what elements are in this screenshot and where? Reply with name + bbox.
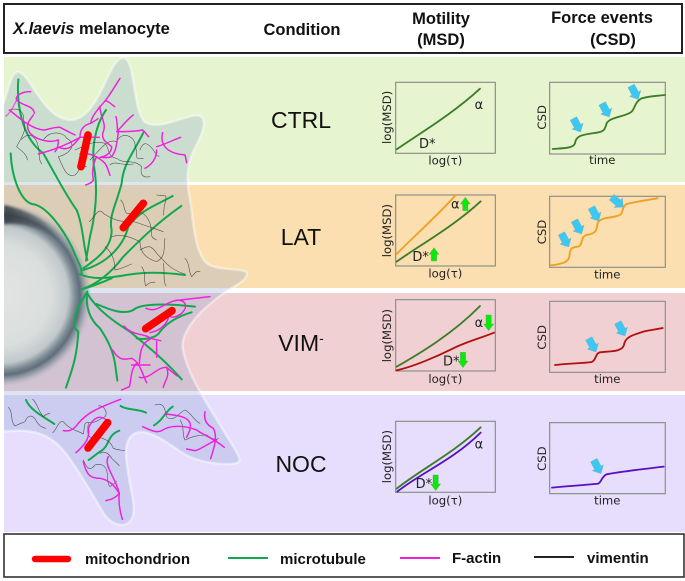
microtubules upper xyxy=(11,79,185,289)
mitochondrion VIM xyxy=(146,311,172,329)
chart: CTRL MSD: log(τ) xyxy=(428,154,462,168)
charts: CTRL and LAT xyxy=(380,82,665,281)
legend: F-actin: F-actin xyxy=(452,550,501,567)
chart: NOC CSD xyxy=(535,423,665,507)
chart: NOC CSD: CSD xyxy=(535,446,549,471)
mitochondrion NOC xyxy=(88,423,108,448)
header bar xyxy=(4,4,682,53)
chart: VIM MSD: log(τ) xyxy=(428,372,462,386)
chart: VIM MSD: D* xyxy=(443,355,460,370)
vimentin upper xyxy=(9,109,200,286)
chart: NOC CSD: time xyxy=(594,493,620,507)
heading: cell: X.laevis melanocyte xyxy=(12,20,170,38)
heading: condition: Condition xyxy=(264,21,340,39)
legend: vimentin: vimentin xyxy=(587,550,649,567)
cell outline xyxy=(0,58,247,525)
legend: F-actin xyxy=(400,550,501,567)
legend xyxy=(4,534,684,577)
chart: VIM MSD xyxy=(380,300,495,386)
chart: LAT MSD: α xyxy=(451,198,460,213)
chart: CTRL CSD: time xyxy=(589,153,615,167)
condition label: LAT: LAT xyxy=(281,224,321,250)
chart: LAT CSD: time xyxy=(594,267,620,281)
legend: microtubule: microtubule xyxy=(280,551,366,568)
chart: CTRL MSD xyxy=(380,82,495,168)
chart: VIM MSD: log(MSD) xyxy=(380,309,394,362)
chart: VIM CSD xyxy=(535,301,665,386)
condition label: VIM-: VIM xyxy=(278,330,319,356)
chart: NOC MSD: log(MSD) xyxy=(380,430,394,483)
chart: VIM CSD: CSD xyxy=(535,325,549,350)
panel: NOC background band xyxy=(4,395,685,532)
chart: LAT MSD: D* xyxy=(412,250,429,265)
panel: LAT background band xyxy=(4,185,685,288)
heading: motility: Motility xyxy=(412,10,471,28)
chart: CTRL CSD xyxy=(535,82,665,167)
chart: VIM MSD: α xyxy=(475,316,483,331)
condition label: VIM-: - xyxy=(319,330,324,346)
chart: CTRL MSD: D* xyxy=(419,137,436,152)
legend: microtubule xyxy=(228,551,366,568)
mitochondrion upper xyxy=(81,135,88,167)
chart: NOC MSD xyxy=(380,421,495,507)
heading: force events: (CSD) xyxy=(590,31,636,49)
vimentin lower xyxy=(8,399,218,487)
panel: VIM background band xyxy=(4,293,685,391)
melanocyte cell illustration xyxy=(0,58,247,525)
chart: LAT CSD xyxy=(535,192,665,281)
chart: LAT MSD xyxy=(380,195,495,281)
chart: CTRL CSD: CSD xyxy=(535,105,549,130)
condition label: CTRL: CTRL xyxy=(271,107,331,133)
legend: mitochondrion: mitochondrion xyxy=(85,551,190,568)
chart: NOC MSD: D* xyxy=(416,477,433,492)
chart: LAT CSD: CSD xyxy=(535,220,549,244)
F-actin upper xyxy=(6,78,187,185)
charts: VIM and NOC xyxy=(380,300,665,507)
panel: CTRL background band xyxy=(4,57,685,182)
chart: NOC MSD: log(τ) xyxy=(428,493,462,507)
F-actin lower xyxy=(63,297,224,519)
chart: LAT MSD: log(MSD) xyxy=(380,204,394,257)
heading: force events: Force events xyxy=(551,9,653,27)
chart: VIM CSD: time xyxy=(594,372,620,386)
chart: CTRL MSD: log(MSD) xyxy=(380,91,394,144)
chart: LAT MSD: log(τ) xyxy=(428,267,462,281)
nucleus / melanosome cluster xyxy=(0,203,92,387)
legend: vimentin xyxy=(534,550,649,567)
mitochondrion middle xyxy=(123,203,143,228)
microtubules lower xyxy=(26,278,195,460)
chart: NOC MSD: α xyxy=(475,438,483,453)
condition label: NOC: NOC xyxy=(275,451,327,477)
chart: CTRL MSD: α xyxy=(475,98,483,113)
heading: motility: (MSD) xyxy=(417,31,465,49)
